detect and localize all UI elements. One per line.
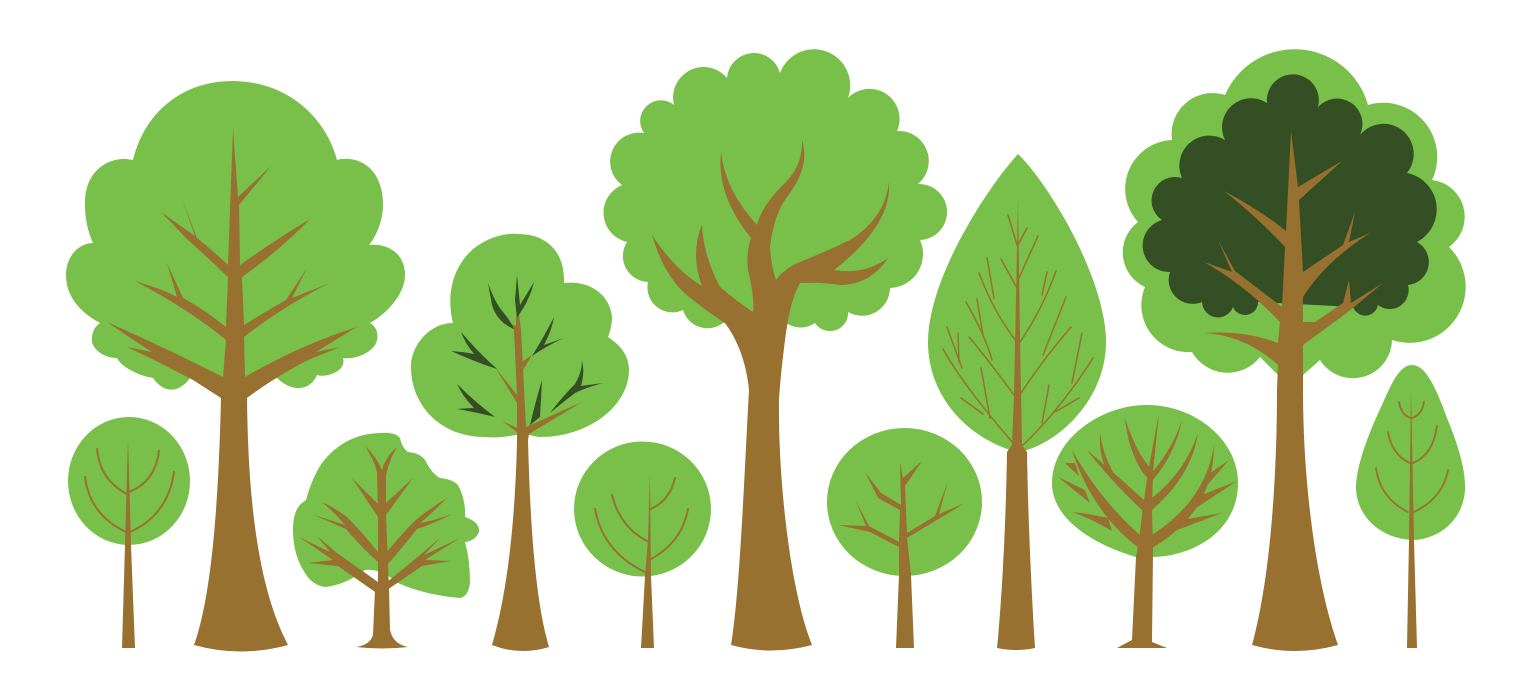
tree: small round tree far left [68,417,190,648]
trunk and branches [1058,413,1237,648]
trunk and branches [299,446,460,648]
tree: tall central tree [603,49,947,650]
tree: small leaf-shaped tree far right [1356,365,1465,648]
crown [574,442,711,576]
trunk and branches [652,140,889,650]
trunk [997,200,1035,650]
crown [603,49,947,331]
tree: small round tree centre left [574,442,711,648]
crown [928,154,1106,450]
tree: wide oval tree [1052,405,1238,648]
trunk and branches [85,437,174,648]
tree: tall leaf-shaped tree [928,154,1106,650]
crown [1356,365,1465,540]
trunk and branches [492,300,582,651]
crown [68,417,190,545]
tree: large left tree [66,81,405,652]
fine branches [943,215,1093,445]
tree: bushy tree with dark leaves [411,234,629,651]
trunk and branches [107,128,357,652]
trunk and branches [595,473,688,648]
trunk and branches [1376,388,1448,648]
crown [293,433,479,598]
crown [1052,405,1238,557]
crown [827,428,982,576]
dark leaves [451,275,603,425]
tree: small round tree centre right [827,428,982,648]
tree: wavy crown tree [293,433,479,648]
trunk and branches [1203,131,1383,651]
crown [66,81,405,390]
outer crown [1123,49,1466,378]
tree: large right tree with dark inner crown [1123,49,1466,651]
crown [411,234,629,437]
inner crown [1143,74,1437,317]
trunk and branches [838,461,965,648]
